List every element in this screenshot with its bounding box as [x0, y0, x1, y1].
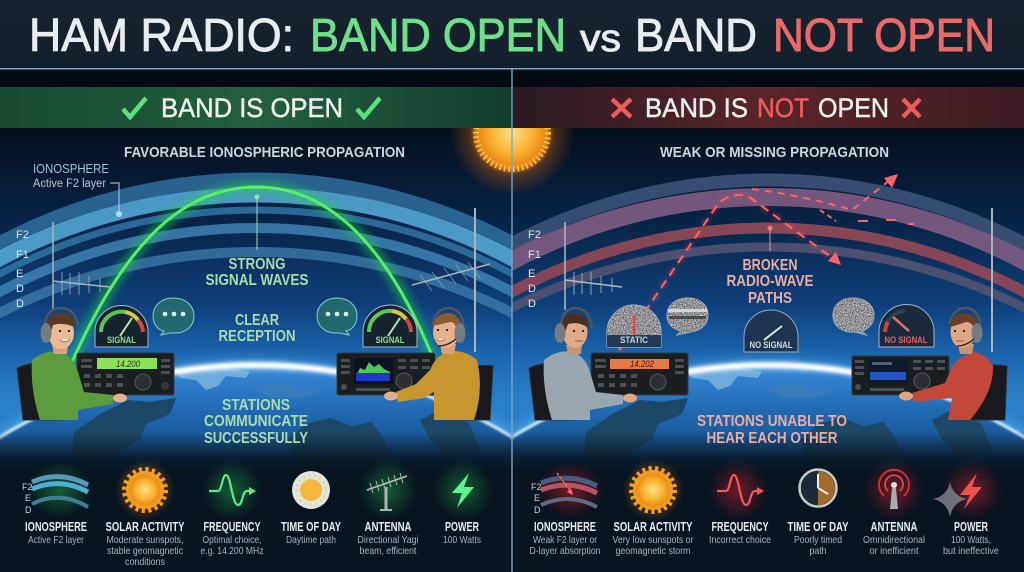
column: solar activity open: [106, 460, 185, 568]
callout: strong signal waves: STRONG: [228, 256, 286, 273]
layer labels: left: D: [16, 283, 24, 295]
operator: [544, 308, 637, 420]
column: frequency open: Optimal choice,: [202, 534, 262, 546]
callout: strong signal waves: SIGNAL WAVES: [206, 272, 309, 289]
column: ionosphere open: [22, 462, 94, 546]
column: ionosphere open: IONOSPHERE: [25, 520, 87, 534]
station: right open: [384, 308, 493, 420]
gauge: center no signal: NO SIGNAL: [750, 340, 793, 351]
icon: weak layers: D: [534, 505, 541, 515]
label: stations communicate: STATIONS: [222, 397, 290, 414]
chair: [529, 363, 574, 420]
subheading: weak propagation: WEAK OR MISSING PROPAGATION: [660, 144, 889, 161]
column: ionosphere not open: IONOSPHERE: [534, 520, 596, 534]
column: ionosphere not open: D-layer absorption: [530, 545, 601, 557]
radio: left orange display: 14.202: [630, 359, 654, 369]
header: band is not open: OPEN: [818, 93, 889, 123]
header: band is not open: BAND IS: [645, 93, 748, 123]
arrowhead: escaping: [884, 174, 898, 188]
icon: weak layers: F2: [531, 482, 542, 492]
icon: lightning bolt: [433, 460, 493, 520]
layer labels: left: D: [16, 298, 24, 310]
icon: ionosphere layers: F2: [22, 482, 33, 492]
operator: [32, 308, 127, 420]
layer labels: right: D: [528, 298, 536, 310]
column: solar activity not open: SOLAR ACTIVITY: [614, 520, 693, 534]
icon: ionosphere layers: [22, 462, 94, 518]
label: unable to hear: STATIONS UNABLE TO: [697, 413, 847, 430]
column: frequency open: e.g. 14.200 MHz: [200, 545, 264, 557]
column: antenna open: beam, efficient: [360, 545, 417, 557]
column: frequency not open: FREQUENCY: [712, 520, 769, 534]
column: power open: [433, 460, 493, 546]
icon: weak layers: [531, 462, 604, 518]
icon: broken bolt: [933, 460, 1002, 520]
gauge: left signal: [95, 306, 148, 347]
label: clear reception: [218, 312, 296, 345]
column: time of day open: [281, 471, 341, 546]
icon: sun: [452, 128, 572, 192]
chair: [963, 365, 1007, 420]
label: unable to hear: HEAR EACH OTHER: [706, 430, 838, 447]
column: time of day not open: [788, 470, 849, 557]
column: frequency not open: [708, 460, 771, 546]
label: stations communicate: SUCCESSFULLY: [204, 430, 308, 447]
column: time of day not open: Poorly timed: [794, 534, 842, 546]
column: time of day not open: path: [810, 545, 827, 557]
column: solar activity open: stable geomagnetic: [107, 545, 183, 557]
title text: vs: [580, 18, 621, 60]
radio: right spectrum display: [337, 353, 435, 395]
antenna: left station not open: [565, 222, 622, 310]
icon: weak layers: E: [534, 493, 540, 503]
column: solar activity open: Moderate sunspots,: [106, 534, 184, 546]
bottom fade: [0, 433, 512, 512]
weakened ionosphere layers: [507, 180, 1024, 310]
callout: broken radio-wave paths: PATHS: [748, 290, 792, 307]
column: time of day open: TIME OF DAY: [281, 520, 341, 534]
column: power open: 100 Watts: [443, 534, 481, 546]
column: time of day not open: TIME OF DAY: [788, 520, 849, 534]
operator: [899, 308, 993, 420]
antenna: left station open: [53, 222, 110, 310]
callout: ionosphere: IONOSPHERE: [33, 161, 109, 176]
gauge: left signal: SIGNAL: [107, 335, 136, 346]
broken wave paths: [619, 174, 914, 350]
station: left not open: [529, 308, 637, 420]
chair: [452, 365, 493, 420]
gauge: static: [607, 305, 661, 347]
column: frequency not open: Incorrect choice: [709, 534, 771, 546]
callout: broken radio-wave paths: RADIO-WAVE: [726, 273, 814, 290]
earth horizon: [512, 354, 1024, 466]
layer labels: right: F2: [528, 229, 541, 241]
icon: sine wave: [202, 460, 262, 520]
column: solar activity not open: Very low sunspots or: [612, 534, 694, 546]
column: ionosphere open: Active F2 layer: [28, 534, 84, 546]
operator: [384, 308, 480, 420]
column: power not open: 100 Watts,: [951, 534, 991, 546]
gauge: center no signal: [744, 310, 798, 352]
label: unable to hear: [697, 413, 847, 447]
layer labels: left: F2: [16, 229, 29, 241]
speech bubble: right: [317, 298, 357, 335]
column: power open: POWER: [445, 520, 479, 534]
label: stations communicate: [204, 397, 308, 447]
divider: [511, 69, 513, 572]
title bar: [0, 0, 1024, 87]
antenna: right station not open: [991, 208, 993, 352]
header: band is open: [0, 87, 512, 128]
column: frequency open: [200, 460, 264, 557]
chair: [17, 363, 62, 420]
label: stations communicate: COMMUNICATE: [204, 413, 308, 430]
panel: band open scene: [0, 150, 512, 466]
callout: ionosphere: [33, 161, 122, 217]
title text: NOT OPEN: [773, 9, 995, 61]
radio: left green display: 14.200: [116, 359, 140, 369]
subheading: favorable propagation: FAVORABLE IONOSPHERIC PROPAGATION: [124, 144, 405, 161]
layer labels: right: [528, 229, 541, 310]
speech bubble: static: [667, 298, 708, 335]
arrowhead: reflected: [828, 252, 841, 265]
column: solar activity open: conditions: [125, 556, 165, 568]
label: clear reception: RECEPTION: [218, 328, 296, 345]
layer labels: left: E: [16, 268, 23, 280]
icon: daytime sun: [292, 471, 330, 509]
icon: sun: [115, 460, 175, 520]
column: solar activity open: SOLAR ACTIVITY: [106, 520, 185, 534]
earth horizon: [0, 354, 512, 466]
column: time of day open: Daytime path: [286, 534, 336, 546]
column: antenna not open: or inefficient: [870, 545, 919, 557]
icon: sun: [622, 459, 684, 521]
title text: BAND: [635, 9, 757, 61]
column: power not open: [933, 460, 1002, 557]
title text: BAND OPEN: [310, 9, 566, 61]
label: clear reception: CLEAR: [235, 312, 279, 329]
icon: yagi antenna: [358, 460, 418, 520]
layer labels: left: F1: [16, 249, 29, 261]
gauge: right signal: SIGNAL: [376, 335, 405, 346]
column: power not open: POWER: [954, 520, 988, 534]
column: ionosphere not open: [530, 462, 604, 557]
column: solar activity not open: geomagnetic storm: [616, 545, 691, 557]
panel: band not open scene: [512, 150, 1024, 466]
gauge: right no signal: NO SIGNAL: [884, 335, 928, 346]
column: solar activity not open: [612, 459, 694, 557]
column: antenna open: [358, 460, 418, 557]
layer labels: right: D: [528, 283, 536, 295]
column: antenna not open: [863, 460, 925, 557]
title text: [29, 9, 995, 61]
icon: clock: [800, 470, 836, 506]
gauge: right signal: [363, 305, 417, 347]
column: power not open: but ineffective: [943, 545, 999, 557]
signal wave arc: [72, 187, 433, 362]
callout: ionosphere: Active F2 layer: [33, 178, 106, 190]
layer labels: right: F1: [528, 249, 541, 261]
header: band is not open: [513, 87, 1024, 128]
icon: ionosphere layers: E: [25, 493, 31, 503]
column: antenna open: ANTENNA: [364, 520, 412, 534]
gauge: static: STATIC: [620, 335, 648, 346]
icon: omni antenna: [864, 460, 924, 520]
callout: strong signal waves: [206, 194, 309, 289]
bottom fade: [512, 433, 1024, 512]
column: ionosphere not open: Weak F2 layer or: [533, 534, 597, 546]
icon: red sine wave: [708, 460, 768, 520]
radio: left orange display: [591, 353, 688, 395]
layer labels: right: E: [528, 268, 535, 280]
layer labels: left: [16, 229, 29, 310]
speech bubble: noise: [833, 298, 874, 335]
header: band is open: BAND IS OPEN: [161, 93, 343, 123]
column: antenna open: Directional Yagi: [358, 534, 418, 546]
column: antenna not open: Omnidirectional: [863, 534, 925, 546]
station: left open: [17, 308, 127, 420]
station: right not open: [899, 308, 1007, 420]
icon: ionosphere layers: D: [25, 505, 32, 515]
callout: broken radio-wave paths: [726, 226, 814, 307]
column: antenna not open: ANTENNA: [870, 520, 918, 534]
speech bubble: left: [153, 298, 194, 335]
radio: right dim display: [852, 356, 949, 395]
antenna: right station open: [412, 208, 490, 352]
radio: left green display: [77, 353, 174, 395]
header: band is not open: NOT: [757, 93, 809, 123]
title text: HAM RADIO:: [29, 9, 294, 61]
column: frequency open: FREQUENCY: [204, 520, 261, 534]
callout: broken radio-wave paths: BROKEN: [742, 257, 798, 274]
gauge: right no signal: [879, 304, 934, 347]
ionosphere layers: [0, 180, 517, 315]
